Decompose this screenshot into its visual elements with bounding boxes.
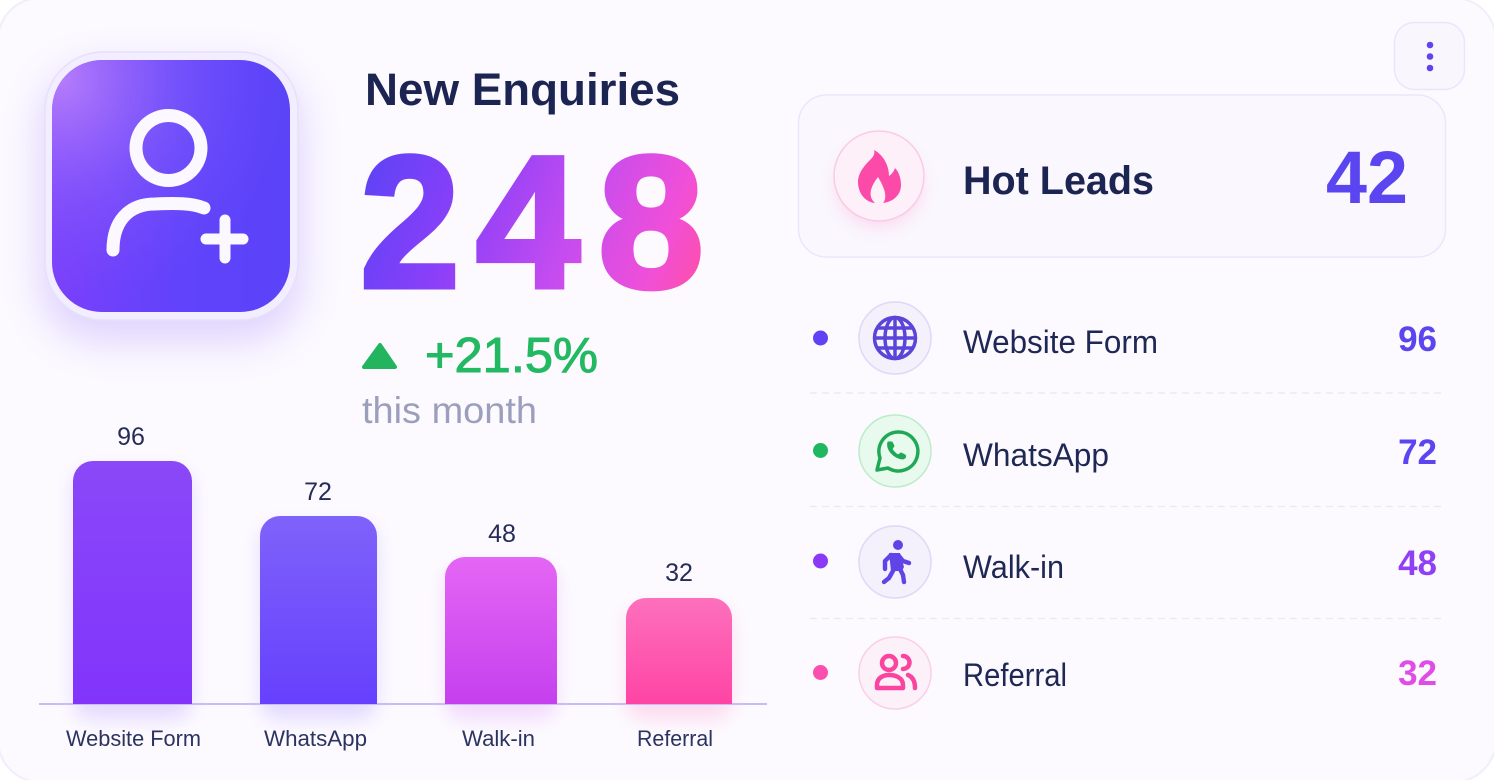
- panel: Hot Leads: 42: [1326, 136, 1408, 219]
- panel: Hot Leads: Hot Leads: [963, 159, 1154, 203]
- list row: Referral: Referral: [963, 657, 1067, 693]
- list row: Walk-in: [813, 526, 1437, 598]
- bar chart: [39, 423, 767, 751]
- list row: WhatsApp: 72: [1398, 433, 1437, 472]
- panel: Hot Leads: [798, 95, 1446, 257]
- icon: people: [859, 637, 931, 709]
- bar: Website Form: 96: [117, 423, 145, 451]
- list row: Walk-in: 48: [1398, 544, 1437, 583]
- icon: add user tile: [40, 52, 302, 342]
- icon: flame: [834, 131, 924, 226]
- total number 248: 2: [360, 117, 460, 327]
- list row: Website Form: 96: [1398, 320, 1437, 359]
- list row: Referral: [813, 637, 1437, 709]
- list row: WhatsApp: [813, 415, 1437, 487]
- growth indicator: +21.5%: [425, 329, 598, 383]
- bar: WhatsApp: 72: [304, 478, 332, 506]
- list row: Website Form: [813, 302, 1437, 374]
- bar: Website Form: Website Form: [66, 726, 201, 751]
- bar: Walk-in: 48: [488, 520, 516, 548]
- bar: WhatsApp: WhatsApp: [264, 726, 367, 751]
- list row: Website Form: Website Form: [963, 324, 1158, 360]
- bar: Walk-in: [445, 520, 557, 751]
- list row: Walk-in: Walk-in: [963, 549, 1064, 585]
- bar: Referral: Referral: [637, 726, 713, 751]
- heading: New Enquiries: New Enquiries: [365, 64, 680, 115]
- bar: WhatsApp: [260, 478, 377, 751]
- list row: Referral: 32: [1398, 654, 1437, 693]
- bar: Walk-in: Walk-in: [462, 726, 535, 751]
- bar: Website Form: [66, 423, 201, 751]
- row dividers: [810, 393, 1444, 618]
- total number 248: 8: [598, 117, 704, 327]
- menu button: [1394, 22, 1464, 90]
- icon: walking person: [859, 526, 931, 598]
- icon: WhatsApp: [859, 415, 931, 487]
- bar: Referral: 32: [665, 559, 693, 587]
- bar: Referral: [626, 559, 732, 751]
- icon: globe: [859, 302, 931, 374]
- caption: this month: this month: [362, 390, 537, 431]
- total number 248: 4: [476, 117, 580, 327]
- list row: WhatsApp: WhatsApp: [963, 437, 1109, 473]
- total number 248: [360, 117, 704, 327]
